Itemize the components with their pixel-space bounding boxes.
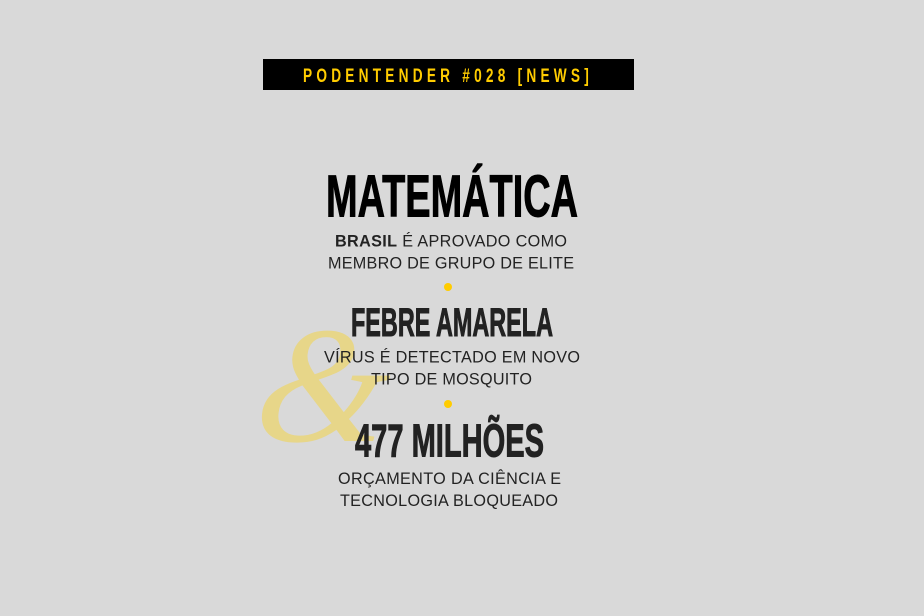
story 3: 477 milhões [338, 414, 561, 510]
text: febre amarela description [324, 348, 580, 388]
text: 477 milhões description [338, 469, 561, 510]
story 1: matemática [326, 164, 578, 272]
banner: podcast title: PODENTENDER #028 [NEWS] [303, 65, 589, 87]
divider dot 2 [444, 400, 452, 408]
divider dot 1 [444, 283, 452, 291]
text: matemática description: BRASIL É APROVADO COMO [335, 232, 567, 250]
text: matemática description [328, 232, 574, 272]
heading: 477 milhões: 477 MILHÕES [355, 414, 544, 466]
heading: febre amarela: FEBRE AMARELA [351, 301, 553, 345]
heading: matemática: MATEMÁTICA [326, 164, 578, 230]
text: 477 milhões description: ORÇAMENTO DA CIÊNCIA E [338, 469, 561, 488]
text: matemática description: MEMBRO DE GRUPO DE ELITE [328, 254, 574, 272]
story 2: febre amarela [324, 301, 580, 388]
text: febre amarela description: TIPO DE MOSQUITO [371, 370, 532, 388]
banner: podcast title [263, 59, 634, 90]
text: 477 milhões description: TECNOLOGIA BLOQUEADO [340, 492, 558, 510]
text: febre amarela description: VÍRUS É DETECTADO EM NOVO [324, 348, 580, 366]
decorative ampersand: & [248, 294, 399, 478]
